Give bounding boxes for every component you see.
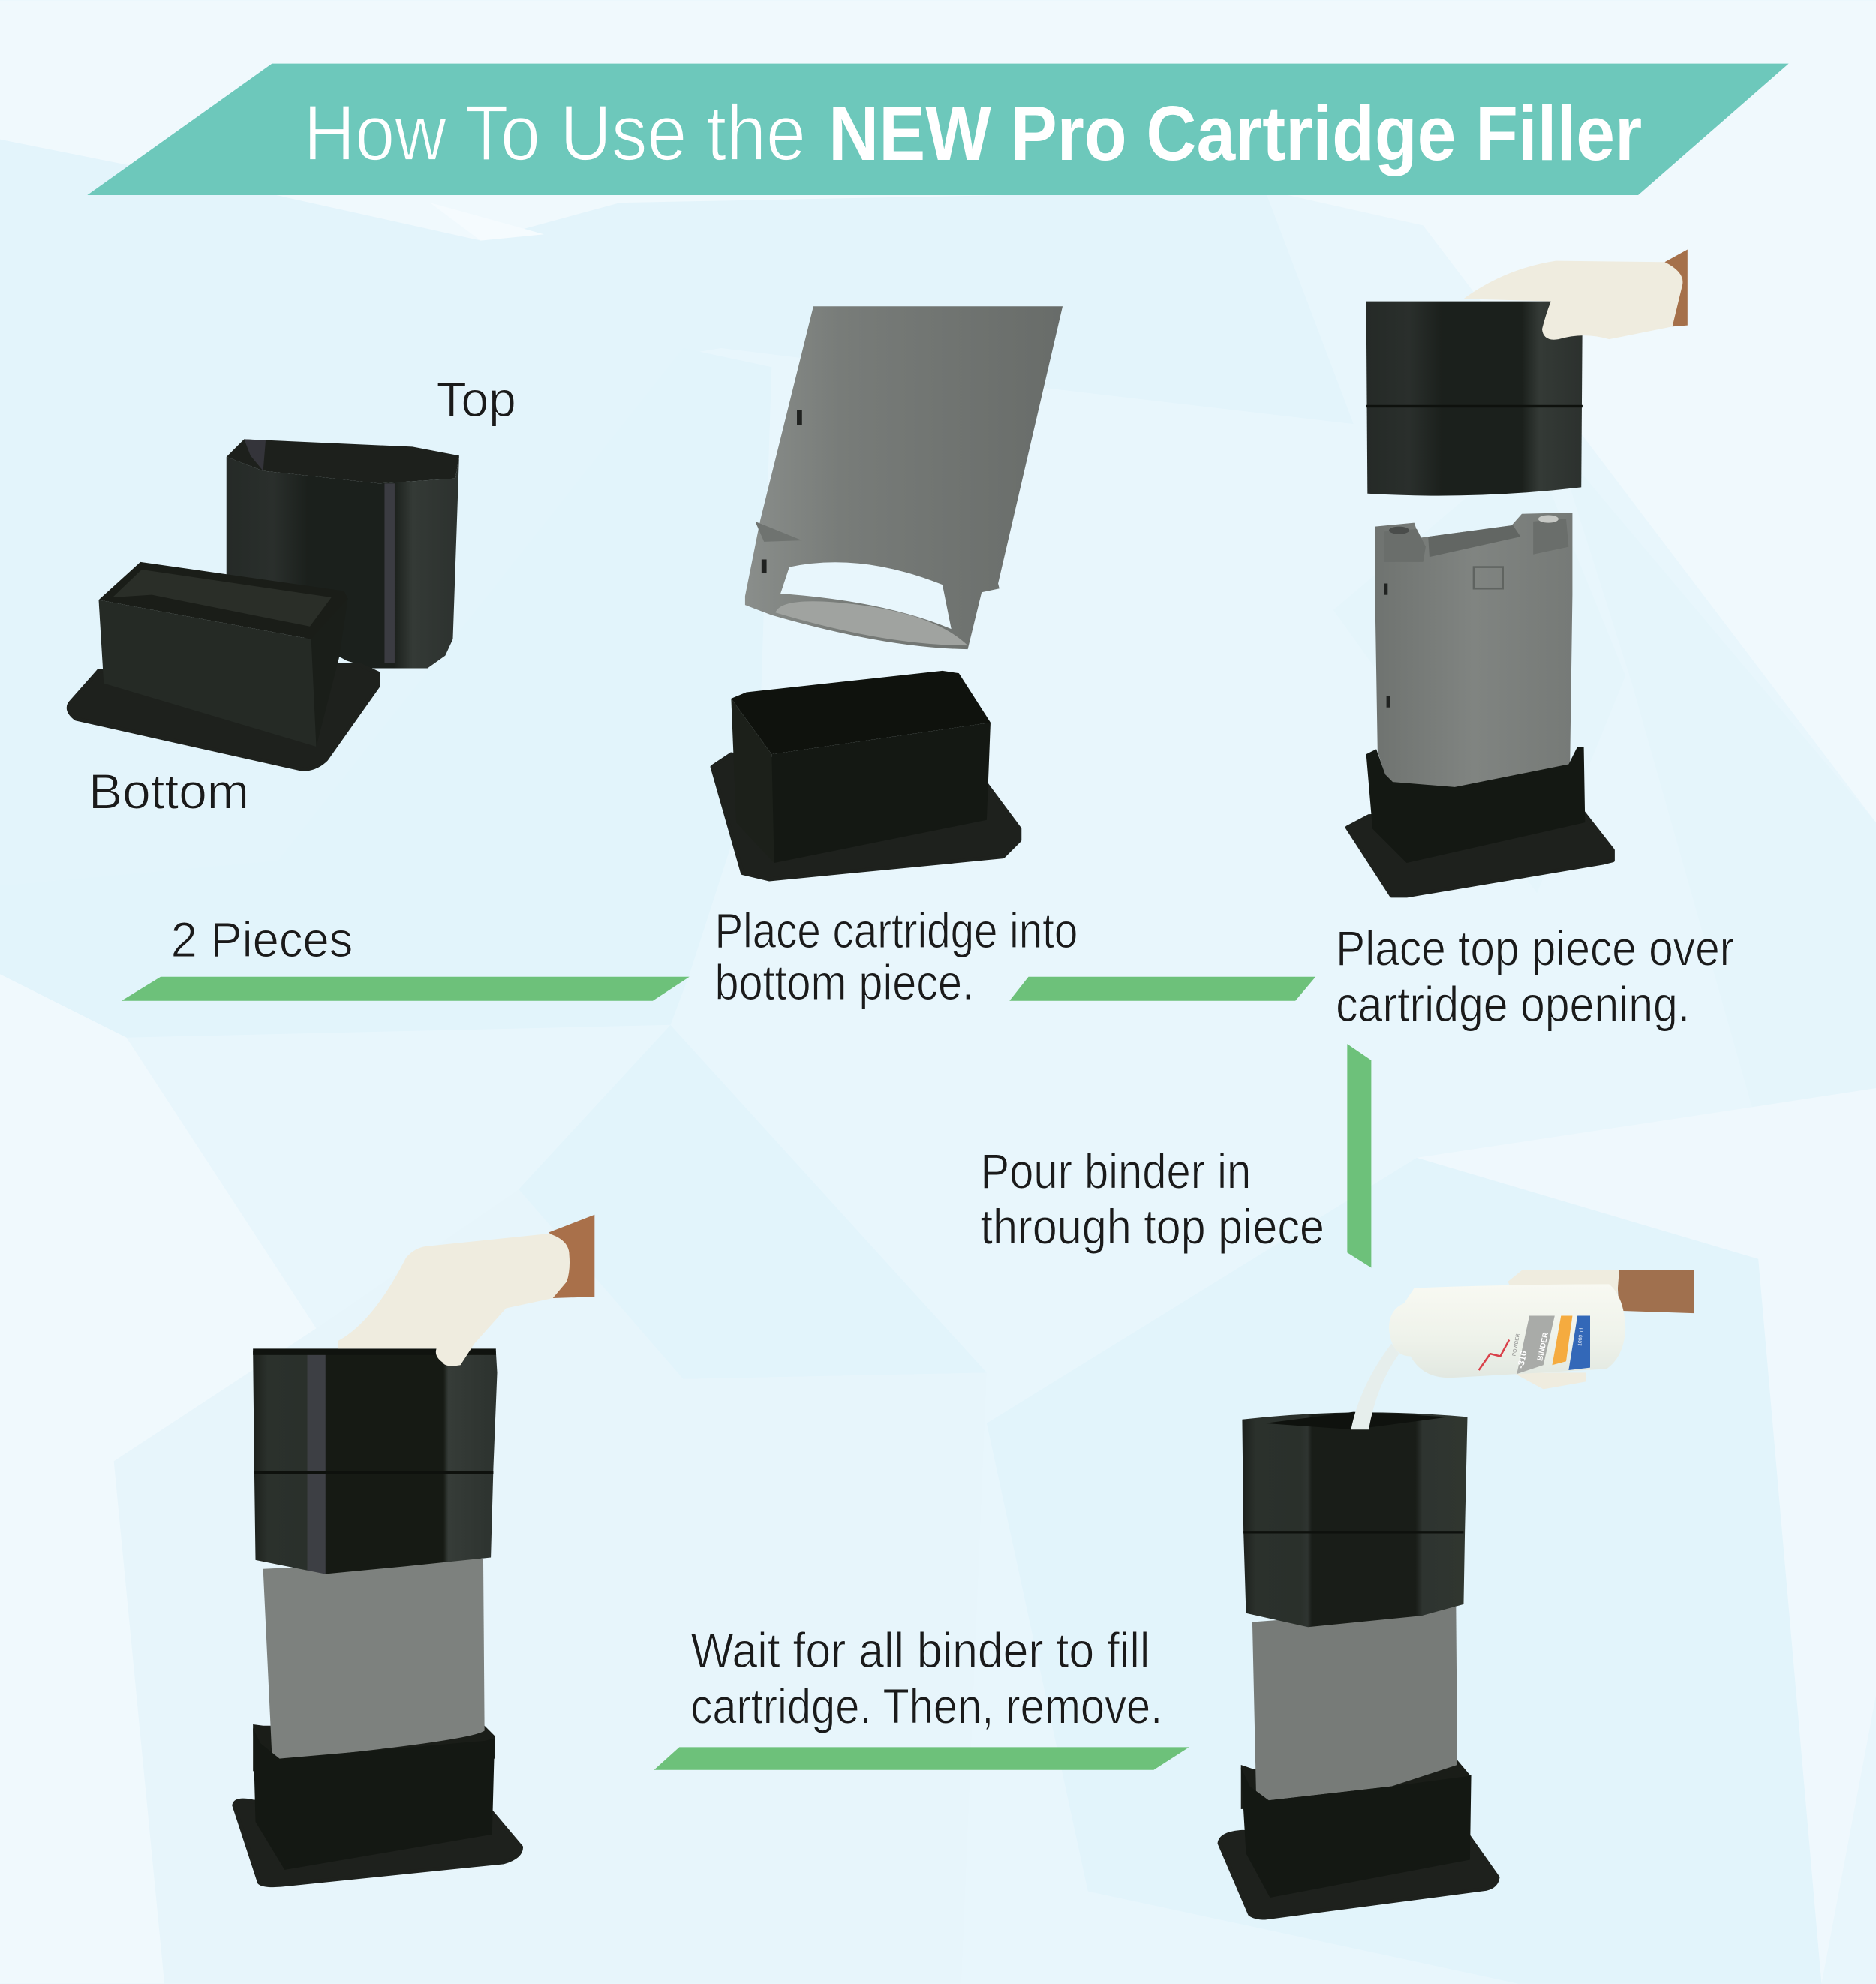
rim back — [1241, 1759, 1470, 1809]
step 5 caption — [690, 1622, 1162, 1733]
top piece — [227, 439, 459, 668]
green connector 1 — [122, 977, 690, 1001]
step 3: top piece over cartridge photo — [1347, 249, 1688, 896]
bottle — [1389, 1284, 1625, 1378]
bottom holder — [712, 671, 1020, 879]
hand and arm — [1508, 1270, 1694, 1389]
cartridge — [1252, 1607, 1457, 1800]
water stream — [1351, 1344, 1399, 1429]
holder — [1219, 1767, 1498, 1918]
green connector 2 — [1009, 977, 1315, 1001]
title bold text: NEW Pro Cartridge Filler — [828, 90, 1642, 176]
step 3 caption — [1336, 921, 1734, 1032]
green connector 4 — [654, 1747, 1189, 1770]
step 2 caption: bottom piece. — [714, 954, 974, 1010]
stack — [1242, 1412, 1467, 1627]
holder — [1347, 747, 1613, 896]
step 5: full assembly with hand photo — [234, 1215, 594, 1886]
step 5 caption: cartridge. Then, remove. — [690, 1678, 1162, 1733]
top stack — [1366, 302, 1583, 496]
rim back — [253, 1724, 495, 1771]
step 5 caption: Wait for all binder to fill — [690, 1622, 1150, 1678]
step 2: cartridge above bottom piece photo — [712, 306, 1063, 879]
title banner — [87, 64, 1789, 195]
cartridge tilted — [745, 306, 1063, 649]
label: Top: Top — [437, 371, 516, 427]
bottle: POWDER — [1512, 1333, 1521, 1357]
cartridge upright — [1375, 513, 1572, 792]
step 2 caption — [714, 903, 1078, 1010]
step 4 caption: through top piece — [980, 1198, 1324, 1254]
glove — [338, 1215, 594, 1366]
step 2 caption: Place cartridge into — [714, 903, 1078, 958]
cartridge — [263, 1559, 485, 1760]
bottom piece — [68, 562, 378, 769]
step 1: two pieces photo — [68, 439, 459, 769]
title text: How To Use the — [304, 89, 806, 177]
label text: -316 — [1515, 1350, 1529, 1369]
label: Bottom: Bottom — [89, 764, 249, 819]
step 1 caption: 2 Pieces — [171, 912, 353, 967]
label stripes — [1517, 1316, 1555, 1374]
bottle: 1000 ml — [1577, 1327, 1584, 1346]
glove — [1463, 249, 1688, 340]
step 4 caption: Pour binder in — [980, 1143, 1251, 1198]
step 3 caption: Place top piece over — [1336, 921, 1734, 976]
green connector 3 — [1347, 1044, 1371, 1267]
step 4: pouring binder photo — [1219, 1270, 1694, 1918]
step 4 caption — [980, 1143, 1324, 1254]
stack — [253, 1348, 498, 1574]
bottle: BINDER — [1536, 1331, 1550, 1362]
step 3 caption: cartridge opening. — [1336, 976, 1690, 1032]
holder — [234, 1728, 522, 1886]
